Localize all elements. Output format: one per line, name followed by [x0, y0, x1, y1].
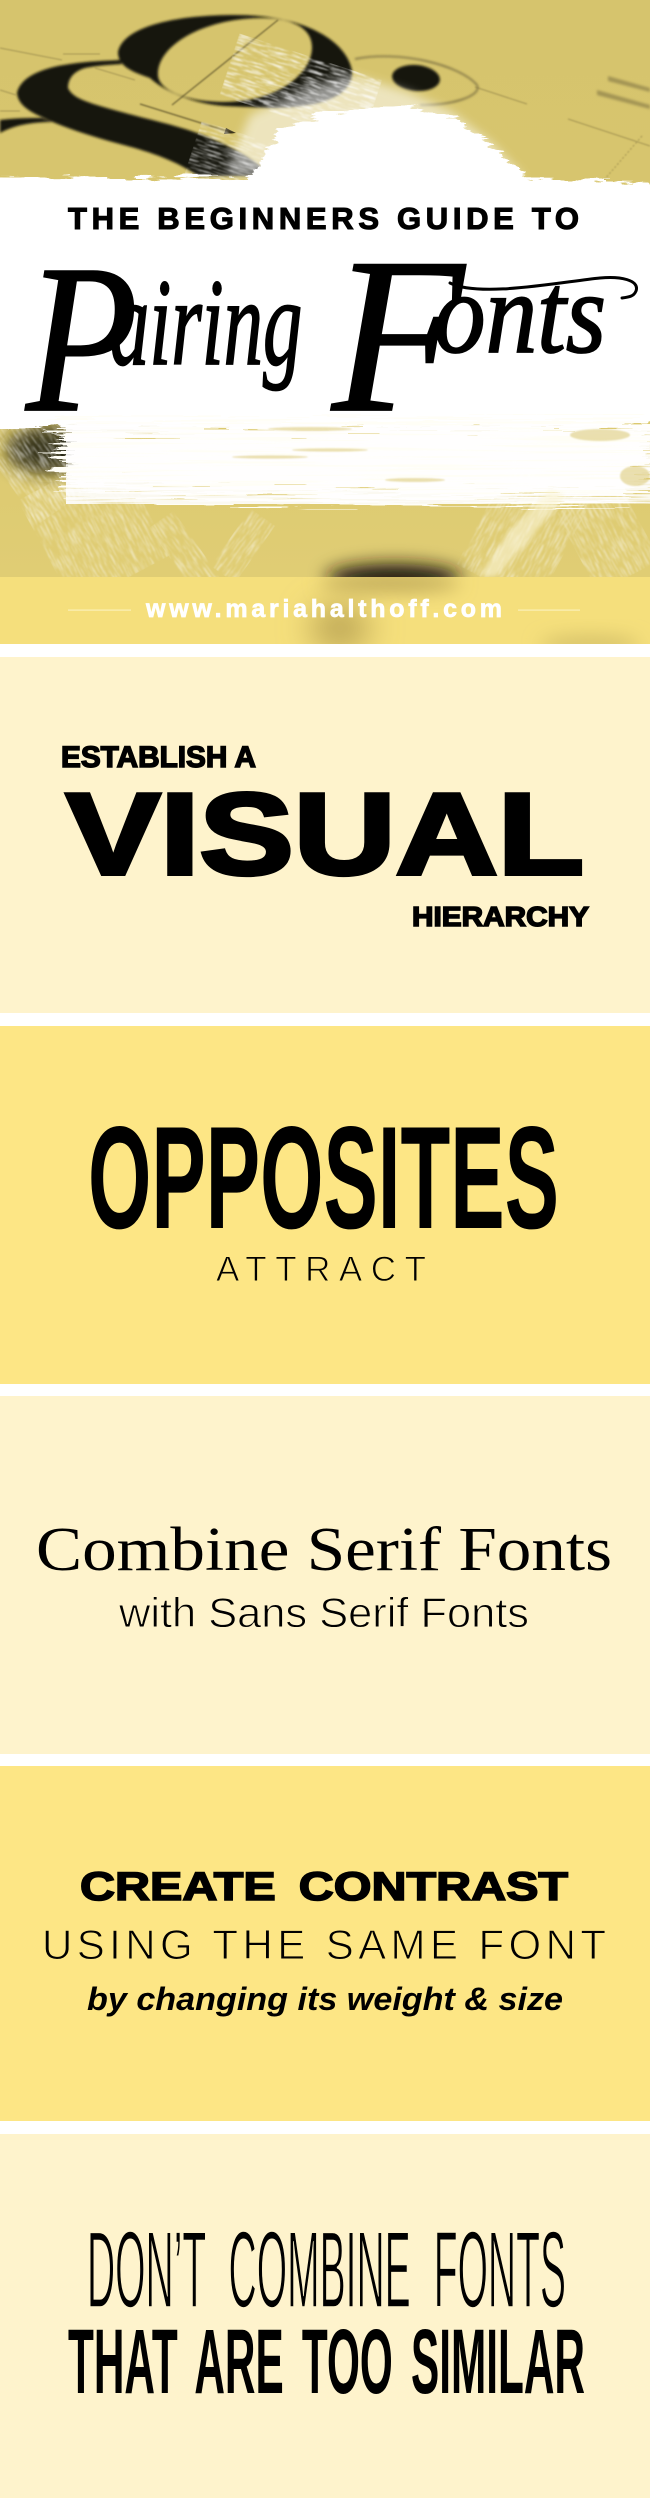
script title: onts: [434, 250, 606, 378]
yellow flecks in the tail: [232, 427, 650, 486]
right rule: [518, 610, 580, 611]
brush tail: [62, 422, 650, 502]
letter g blurred shapes: [0, 15, 478, 176]
hatching over smudge: [0, 424, 84, 522]
script title: [24, 213, 637, 459]
flourish: crossbar swash: [450, 278, 637, 298]
script title: F: [330, 213, 466, 459]
text: establish a: ESTABLISH A: [61, 741, 256, 774]
text: by changing its weight and size: by changing its weight & size: [87, 1981, 563, 2017]
soft scratchy white above the blob: [225, 75, 525, 178]
white dab streak lower right: [480, 490, 565, 577]
panel: visual hierarchy: [0, 657, 650, 1013]
panel: combine serif with sans: [0, 1396, 650, 1754]
text: using the same font: USING THE SAME FONT: [42, 1921, 606, 1968]
header small title: THE BEGINNERS GUIDE TO: [68, 201, 579, 236]
hatching over letter: [220, 34, 382, 122]
script title: P: [24, 221, 138, 456]
main white brush band: [0, 177, 650, 428]
text: combine serif fonts: Combine Serif Fonts: [36, 1516, 612, 1584]
text: attract: ATTRACT: [216, 1250, 426, 1289]
hairline construction marks: [0, 20, 650, 180]
text: create contrast: CREATE CONTRAST: [80, 1865, 568, 1909]
panel: opposites attract: [0, 1026, 650, 1384]
dark smudge bottom: [326, 564, 462, 592]
panel: don't combine similar fonts: [0, 2134, 650, 2498]
strip shading: [299, 577, 636, 644]
blurred type on the right: [597, 76, 650, 109]
left rule: [68, 610, 131, 611]
text: visual: VISUAL: [66, 769, 584, 899]
script title: airing: [110, 254, 322, 391]
text: with sans serif fonts: with Sans Serif Fonts: [118, 1589, 529, 1636]
panel: create contrast: [0, 1766, 650, 2121]
small arrow head: [224, 128, 236, 134]
white scratches lower: [21, 478, 650, 577]
dark smudge lower left: [6, 426, 90, 474]
footer strip with website: [0, 577, 650, 644]
white dabs above the band: [250, 106, 535, 182]
header panel: photo with brush stroke: [0, 0, 650, 655]
website url: www.mariahalthoff.com: [145, 595, 502, 623]
text: hierarchy: HIERARCHY: [412, 901, 589, 932]
photo background with blurred letterform: [0, 0, 650, 606]
